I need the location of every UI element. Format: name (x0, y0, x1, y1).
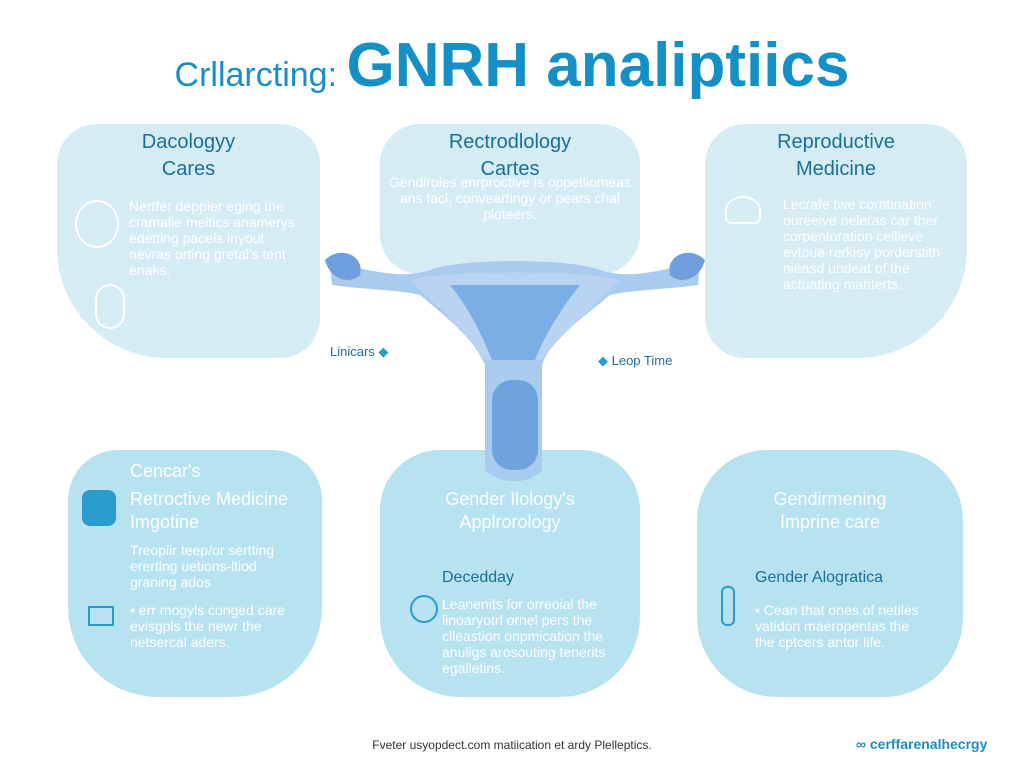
text block: Leanenits for orreoial the linoaryotrl ornel pers the clleastion onpmication the anuligs arosouting tenerits egalletins. (442, 596, 605, 676)
panel: top-right (705, 124, 967, 358)
heading: Cencar's (130, 461, 200, 481)
heading: Gender Ilology's (445, 489, 575, 509)
heading: Cartes (481, 158, 539, 180)
heading: Gendirmening (773, 489, 887, 509)
text block: Nertfer deppler eging the cramalle meltics anamerys edetting pacels inyout nevras orting gretal's tent enaks. (129, 198, 295, 278)
heading: Applrorology (459, 512, 561, 532)
title: Crllarcting: GNRH analiptiics (175, 31, 849, 100)
logo: ∞ cerffarenalhecrgy (856, 736, 987, 752)
panel: top-left (57, 124, 320, 358)
icon: monitor (88, 606, 114, 626)
heading 2 (130, 489, 288, 532)
text block 2: • err mogyls conged care evisgpls the newr the netsercal aders. (130, 602, 285, 650)
text block: Gendiroles enrproctive is oppetliomeas ans tacl, conveartingy or pears chal ploteers. (389, 174, 631, 222)
heading: Medicine (796, 158, 876, 180)
text block: Lecrafe twe corntination oureeive neleras car ther corpentoration cellieve evtoue rerkisy porderstith nieasd undeat of the actuating manterts. (783, 196, 940, 292)
footer text: Fveter usyopdect.com matiication et ardy Plelleptics. (372, 738, 652, 752)
illustration: uterus (325, 252, 705, 482)
subheading: Decedday (442, 569, 514, 586)
heading: Dacologyy (142, 131, 235, 153)
text block: Treoplir teep/or sertting erertlng uetions-ltiod graning ados (130, 542, 274, 590)
heading (777, 131, 895, 180)
text block: • Cean that ones of netiles vatidon maeropentas the the cptcers antor life. (755, 602, 919, 650)
icon: tube (95, 284, 125, 329)
heading (773, 489, 887, 532)
icon: hexagon (82, 490, 116, 526)
heading: Cares (162, 158, 215, 180)
icon: person (721, 586, 735, 626)
panel: bottom-left (68, 450, 322, 697)
heading: Imprine care (780, 512, 880, 532)
panel: top-middle (380, 124, 640, 274)
heading: Rectrodlology (449, 131, 571, 153)
icon: helmet (725, 196, 761, 224)
subheading: Gender Alogratica (755, 569, 883, 586)
callout: Linicars: Linicars ◆ (330, 344, 388, 359)
icon: stethoscope (410, 595, 438, 623)
heading 2: Retroctive Medicine (130, 489, 288, 509)
panel: bottom-right (697, 450, 963, 697)
icon: organ (75, 200, 119, 248)
heading (449, 131, 571, 180)
heading (142, 131, 235, 180)
heading (445, 489, 575, 532)
panel: bottom-middle (380, 450, 640, 697)
heading: Reproductive (777, 131, 895, 153)
callout: Leop Time: ◆ Leop Time (598, 353, 672, 368)
heading 2: Imgotine (130, 512, 199, 532)
